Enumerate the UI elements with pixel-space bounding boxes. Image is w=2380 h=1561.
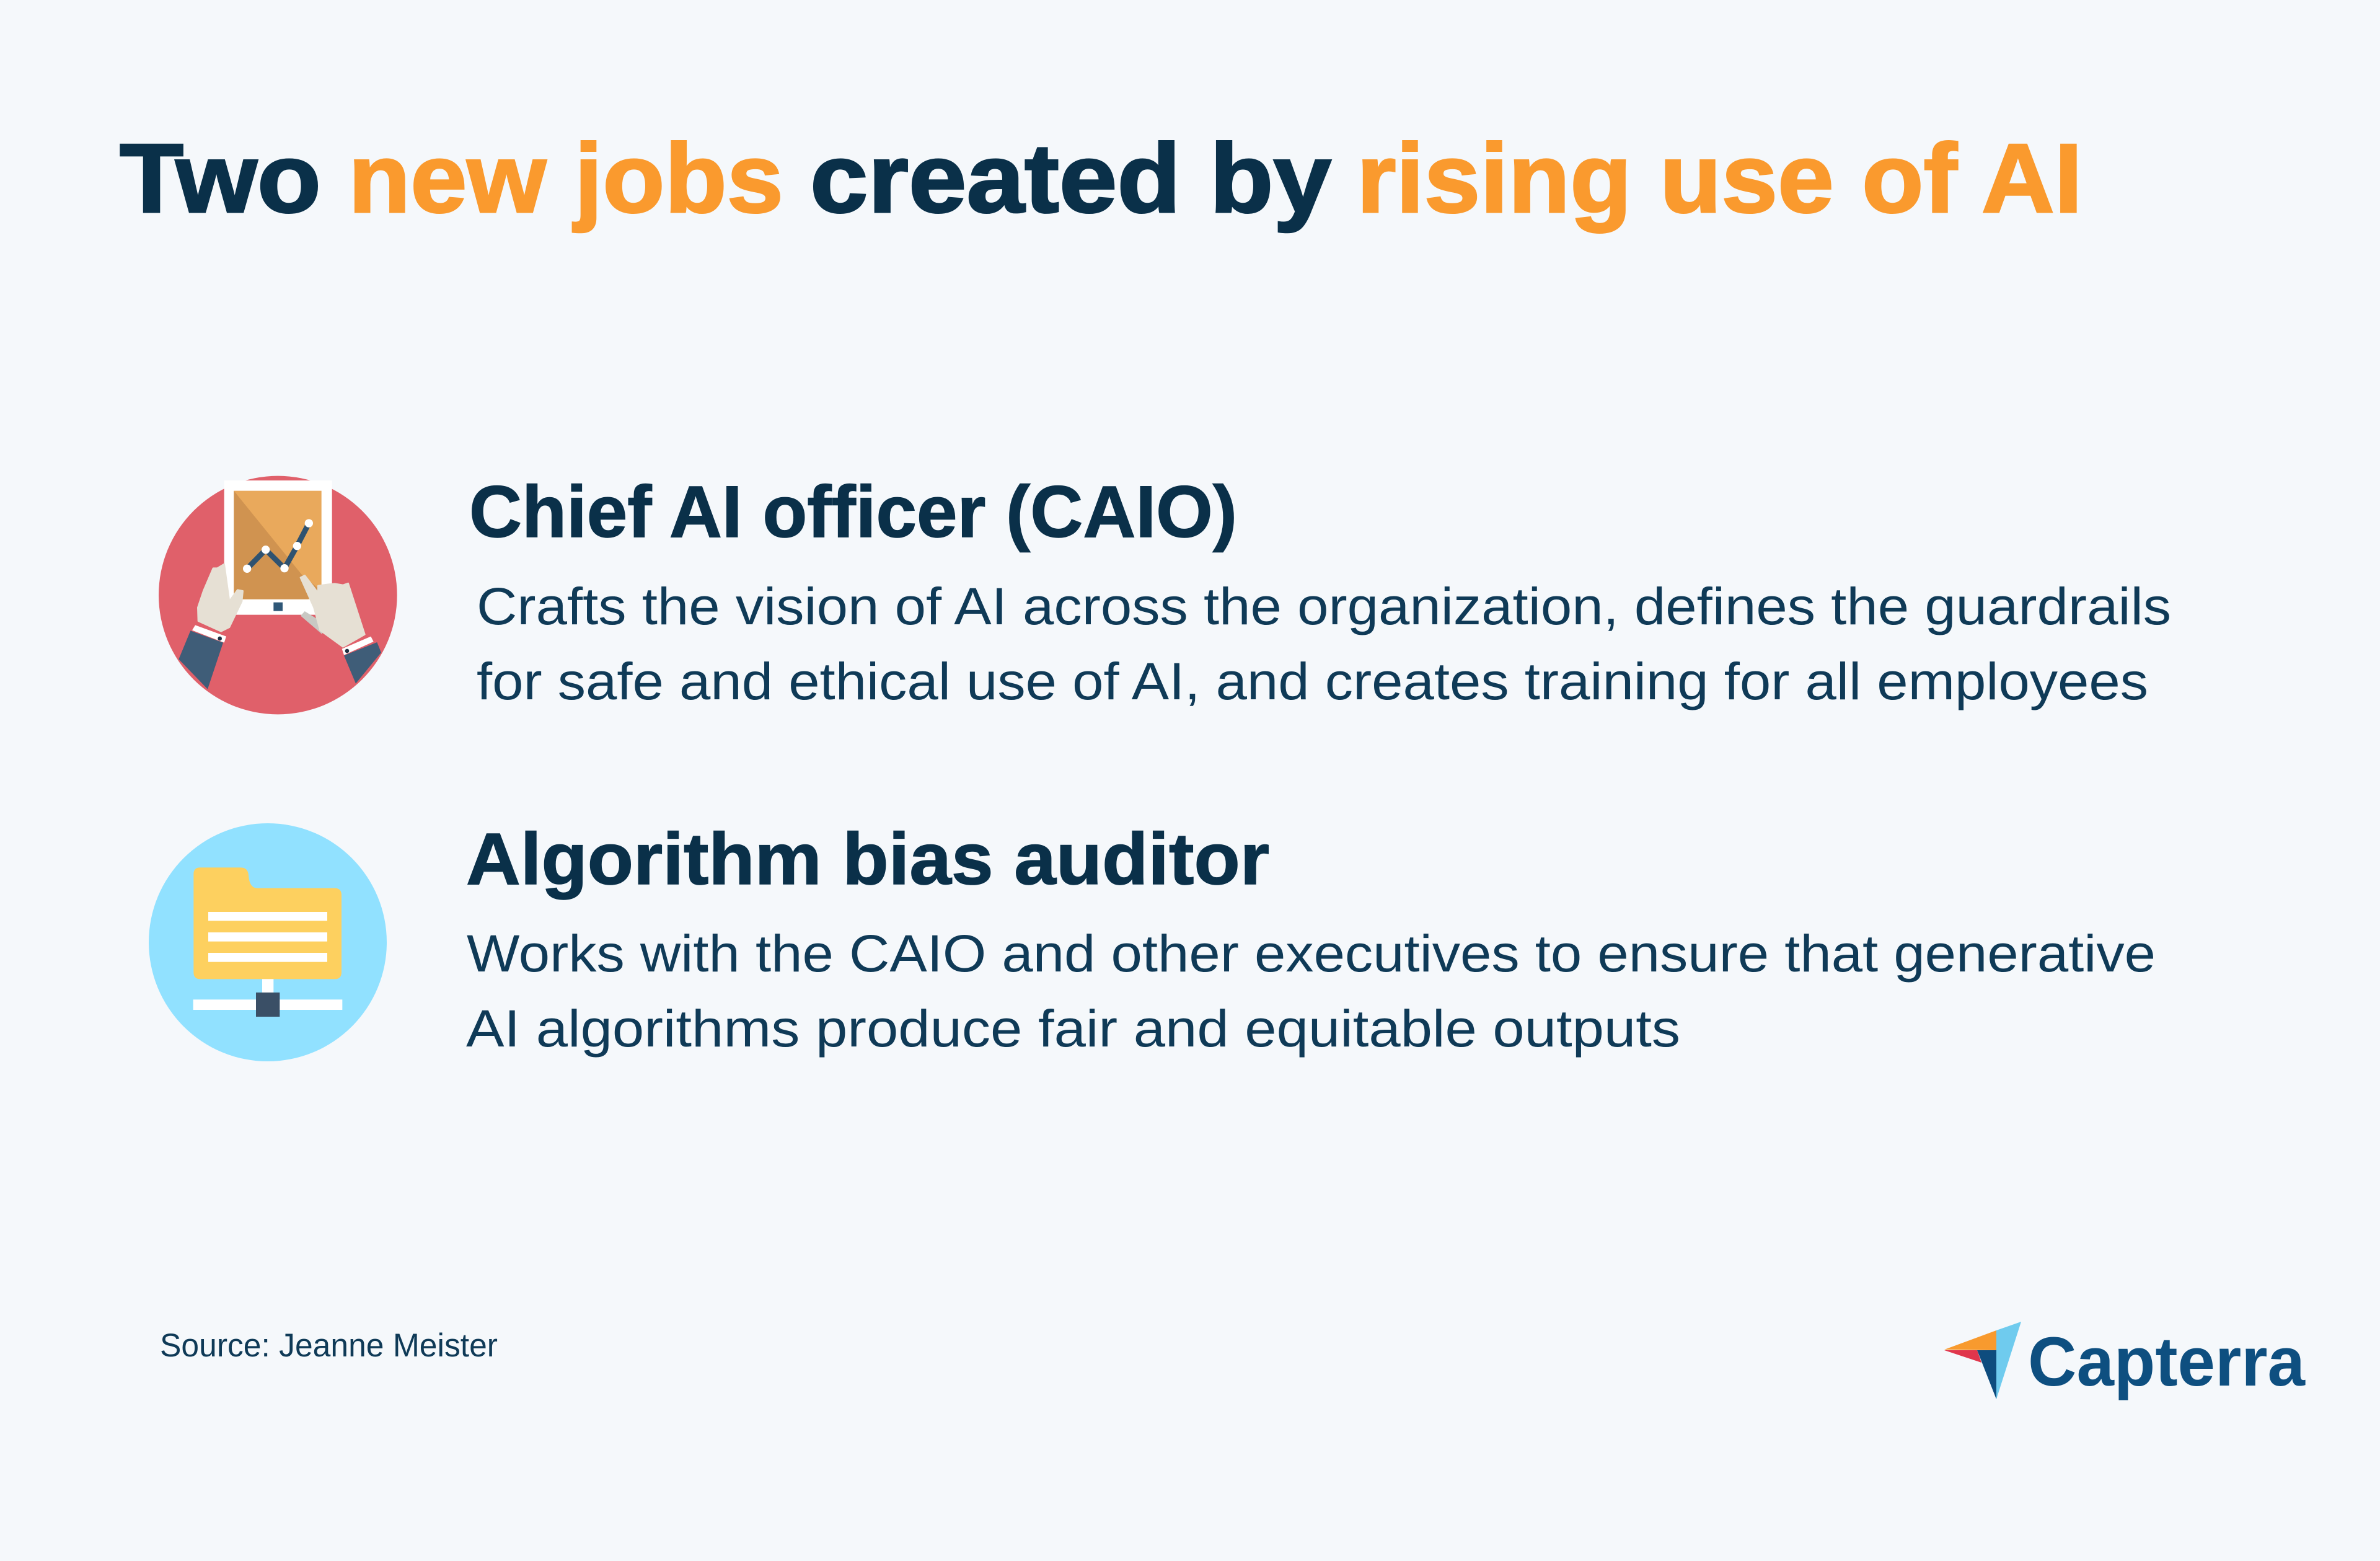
icon: tablet with chart held by two hands bbox=[159, 476, 397, 714]
title: created by bbox=[810, 124, 1331, 233]
title bbox=[120, 124, 2082, 233]
title: rising use of AI bbox=[1357, 124, 2082, 233]
heading: Algorithm bias auditor: Algorithm bias auditor bbox=[466, 818, 1269, 900]
icon: folder on network bbox=[149, 823, 387, 1061]
logo: Capterra: Capterra bbox=[2028, 1323, 2306, 1400]
icon: Capterra arrow bbox=[1944, 1322, 2021, 1399]
text block: Chief AI officer description: for safe and ethical use of AI, and creates training for all employees bbox=[477, 652, 2148, 710]
source note: Source: Jeanne Meister bbox=[160, 1327, 498, 1364]
text block: Chief AI officer description bbox=[477, 577, 2171, 710]
heading: Chief AI officer (CAIO): Chief AI officer (CAIO) bbox=[469, 471, 1237, 553]
title: new jobs bbox=[348, 124, 783, 233]
text block: Algorithm bias auditor description: AI algorithms produce fair and equitable outputs bbox=[466, 999, 1680, 1058]
text block: Algorithm bias auditor description bbox=[466, 924, 2156, 1058]
text block: Algorithm bias auditor description: Works with the CAIO and other executives to ensure that generative bbox=[467, 924, 2156, 983]
title: Two bbox=[120, 124, 321, 233]
text block: Chief AI officer description: Crafts the vision of AI across the organization, defines the guardrails bbox=[477, 577, 2171, 635]
